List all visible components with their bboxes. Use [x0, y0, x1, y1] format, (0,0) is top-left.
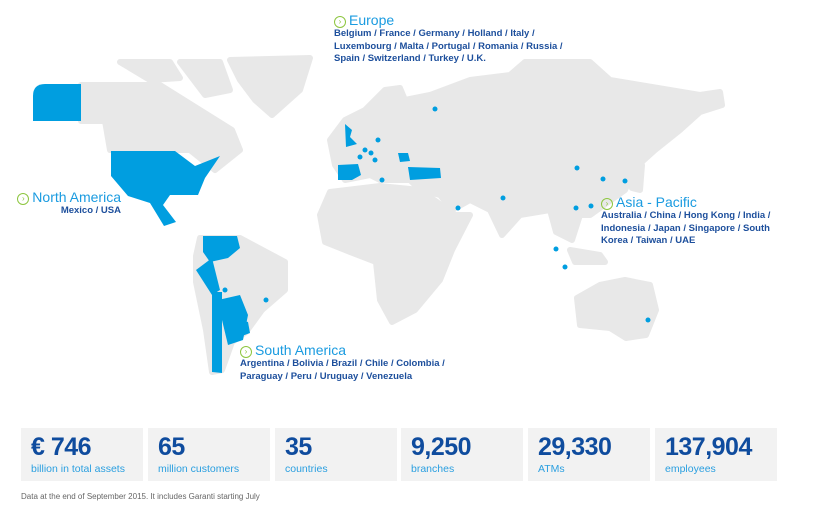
stat: countries: countries — [285, 463, 328, 475]
region label: Europe: Belgium / France / Germany / Holland / Italy / — [334, 28, 535, 39]
footnote: Data at the end of September 2015. It includes Garanti starting July — [21, 492, 260, 501]
region label: Asia-Pacific: Australia / China / Hong Kong / India / — [601, 210, 770, 221]
region label: Europe: › — [339, 17, 341, 26]
stat: customers: 65 — [158, 433, 185, 461]
region label: North America: Mexico / USA — [61, 205, 121, 216]
region label: South America: South America — [255, 342, 346, 358]
stat: branches: 9,250 — [411, 433, 471, 461]
stat: employees — [655, 428, 777, 481]
stat: countries — [275, 428, 397, 481]
stat: assets: € 746 — [31, 433, 91, 461]
stat: countries: 35 — [285, 433, 312, 461]
stat: customers — [148, 428, 270, 481]
stat: ATMs — [528, 428, 650, 481]
region label: Europe: Spain / Switzerland / Turkey / U.K. — [334, 53, 486, 64]
stat: ATMs: 29,330 — [538, 433, 611, 461]
region label: Asia-Pacific — [601, 194, 770, 246]
stat: assets — [21, 428, 143, 481]
region label: Europe: Luxembourg / Malta / Portugal / Romania / Russia / — [334, 40, 563, 52]
stat: branches: branches — [411, 463, 454, 475]
region label: Asia-Pacific: Asia - Pacific — [616, 194, 697, 210]
region label: Asia-Pacific: › — [606, 199, 608, 208]
stat: branches — [401, 428, 523, 481]
region label: North America: › — [22, 194, 25, 203]
region label: Asia-Pacific: Korea / Taiwan / UAE — [601, 235, 695, 246]
region label: Europe: Europe — [349, 12, 394, 28]
region label: North America — [17, 189, 122, 216]
region label: South America — [240, 342, 445, 382]
stat: employees: 137,904 — [665, 433, 752, 461]
region label: South America: Argentina / Bolivia / Brazil / Chile / Colombia / — [240, 358, 445, 369]
region label: South America: › — [245, 347, 247, 356]
stat: customers: million customers — [158, 463, 239, 475]
region label: North America: North America — [32, 189, 121, 205]
region label: Europe — [334, 12, 563, 64]
region label: South America: Paraguay / Peru / Uruguay / Venezuela — [240, 370, 412, 382]
stat: ATMs: ATMs — [538, 463, 565, 475]
stat: employees: employees — [665, 463, 716, 475]
stat: assets: billion in total assets — [31, 463, 125, 475]
region label: Asia-Pacific: Indonesia / Japan / Singapore / South — [601, 222, 770, 234]
